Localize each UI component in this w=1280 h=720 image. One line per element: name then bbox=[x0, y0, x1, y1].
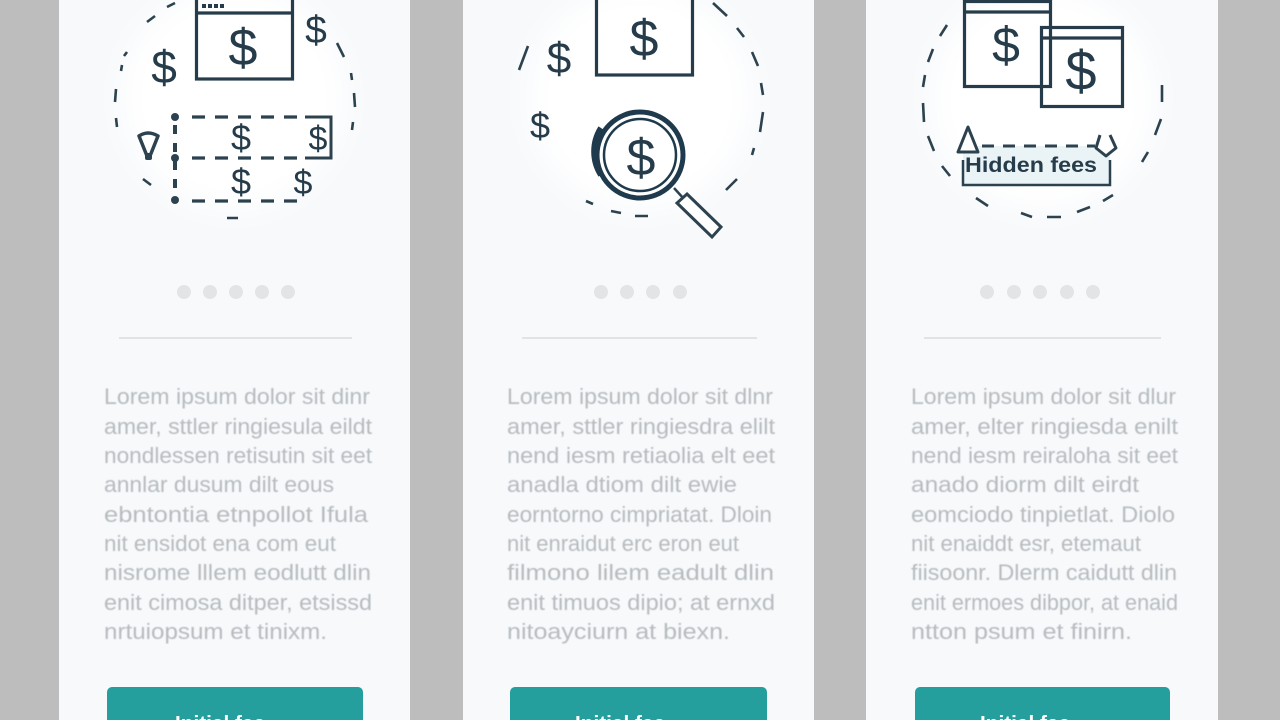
text block 2: anadla dtiom dilt ewie bbox=[507, 472, 737, 497]
icon: dollar window 1 bbox=[196, 0, 292, 79]
icon: magnifying glass: $ bbox=[627, 129, 656, 187]
text block 2: nend iesm retiaolia elt eet bbox=[507, 443, 776, 468]
icon: dollar window 2 bbox=[596, 0, 692, 75]
icon: loose dollar right: $ bbox=[305, 9, 327, 52]
icon: dashed fee table bbox=[171, 113, 331, 204]
icon: dollar window 2: $ bbox=[630, 10, 659, 68]
icon: dashed circle 3 bbox=[923, 25, 1162, 217]
panel: card 2 bbox=[463, 0, 814, 720]
indicator dots 1 bbox=[177, 285, 295, 299]
text block 3: eomciodo tinpietlat. Diolo bbox=[911, 502, 1175, 527]
icon: dashed fee table: $ bbox=[231, 117, 251, 158]
text block 3: anado diorm dilt eirdt bbox=[911, 472, 1140, 497]
text block 1: enit cimosa ditper, etsissd bbox=[104, 590, 372, 615]
icon: hidden fees label: Hidden fees bbox=[965, 154, 1097, 177]
text block 3: nit enaiddt esr, etemaut bbox=[911, 531, 1142, 556]
text block 3: nend iesm reiraloha sit eet bbox=[911, 443, 1179, 468]
button 3 bbox=[915, 687, 1170, 720]
text block 1: nit ensidot ena com eut bbox=[104, 531, 337, 556]
icon: dashed fee table: $ bbox=[231, 161, 251, 202]
button 2 bbox=[510, 687, 767, 720]
panel: card 3 bbox=[866, 0, 1218, 720]
icon: magnifying glass bbox=[594, 112, 721, 237]
text block 3: ntton psum et finirn. bbox=[911, 619, 1132, 644]
icon: bulb bbox=[139, 133, 158, 160]
icon: front dollar window bbox=[1041, 28, 1123, 106]
text block 1: nisrome lllem eodlutt dlin bbox=[104, 560, 371, 585]
text block 1: nrtuiopsum et tinixm. bbox=[104, 619, 327, 644]
icon: dashed fee table: $ bbox=[294, 164, 313, 202]
panel: card 1 bbox=[59, 0, 410, 720]
icon: loose dollar left: $ bbox=[151, 41, 177, 93]
text block 3: amer, elter ringiesda enilt bbox=[911, 414, 1179, 439]
indicator dots 3 bbox=[980, 285, 1100, 299]
text block 2: Lorem ipsum dolor sit dlnr bbox=[507, 384, 774, 409]
icon: dollar window 1: $ bbox=[229, 19, 258, 77]
icon: dashed circle 1 bbox=[115, 3, 355, 218]
text block 2: nitoayciurn at biexn. bbox=[507, 619, 730, 644]
text block 3: Lorem ipsum dolor sit dlur bbox=[911, 384, 1177, 409]
text block 1: annlar dusum dilt eous bbox=[104, 472, 334, 497]
text block 2: filmono lilem eadult dlin bbox=[507, 560, 774, 585]
text block 2: amer, sttler ringiesdra elilt bbox=[507, 414, 776, 439]
text block 2: nit enraidut erc eron eut bbox=[507, 531, 740, 556]
text block 1: amer, sttler ringiesula eildt bbox=[104, 414, 373, 439]
icon: hidden fees label bbox=[958, 127, 1116, 185]
icon: back dollar window: $ bbox=[992, 17, 1020, 73]
icon: back dollar window bbox=[964, 2, 1050, 86]
text block 2: enit timuos dipio; at ernxd bbox=[507, 590, 775, 615]
text block 2: eorntorno cimpriatat. Dloin bbox=[507, 502, 772, 527]
button 1 bbox=[107, 687, 363, 720]
text block 1: nondlessen retisutin sit eet bbox=[104, 443, 373, 468]
icon: front dollar window: $ bbox=[1065, 39, 1097, 102]
text block 3: enit ermoes dibpor, at enaid bbox=[911, 590, 1178, 615]
text block 1: Lorem ipsum dolor sit dinr bbox=[104, 384, 371, 409]
icon: loose dollar upper: $ bbox=[547, 34, 571, 83]
icon: dashed fee table: $ bbox=[309, 120, 328, 158]
text block 1: ebntontia etnpollot Ifula bbox=[104, 502, 369, 527]
icon: dashed circle 2 bbox=[519, 3, 763, 216]
icon: loose dollar lower: $ bbox=[530, 105, 550, 146]
text block 3: fiisoonr. Dlerm caidutt dlin bbox=[911, 560, 1177, 585]
indicator dots 2 bbox=[594, 285, 687, 299]
